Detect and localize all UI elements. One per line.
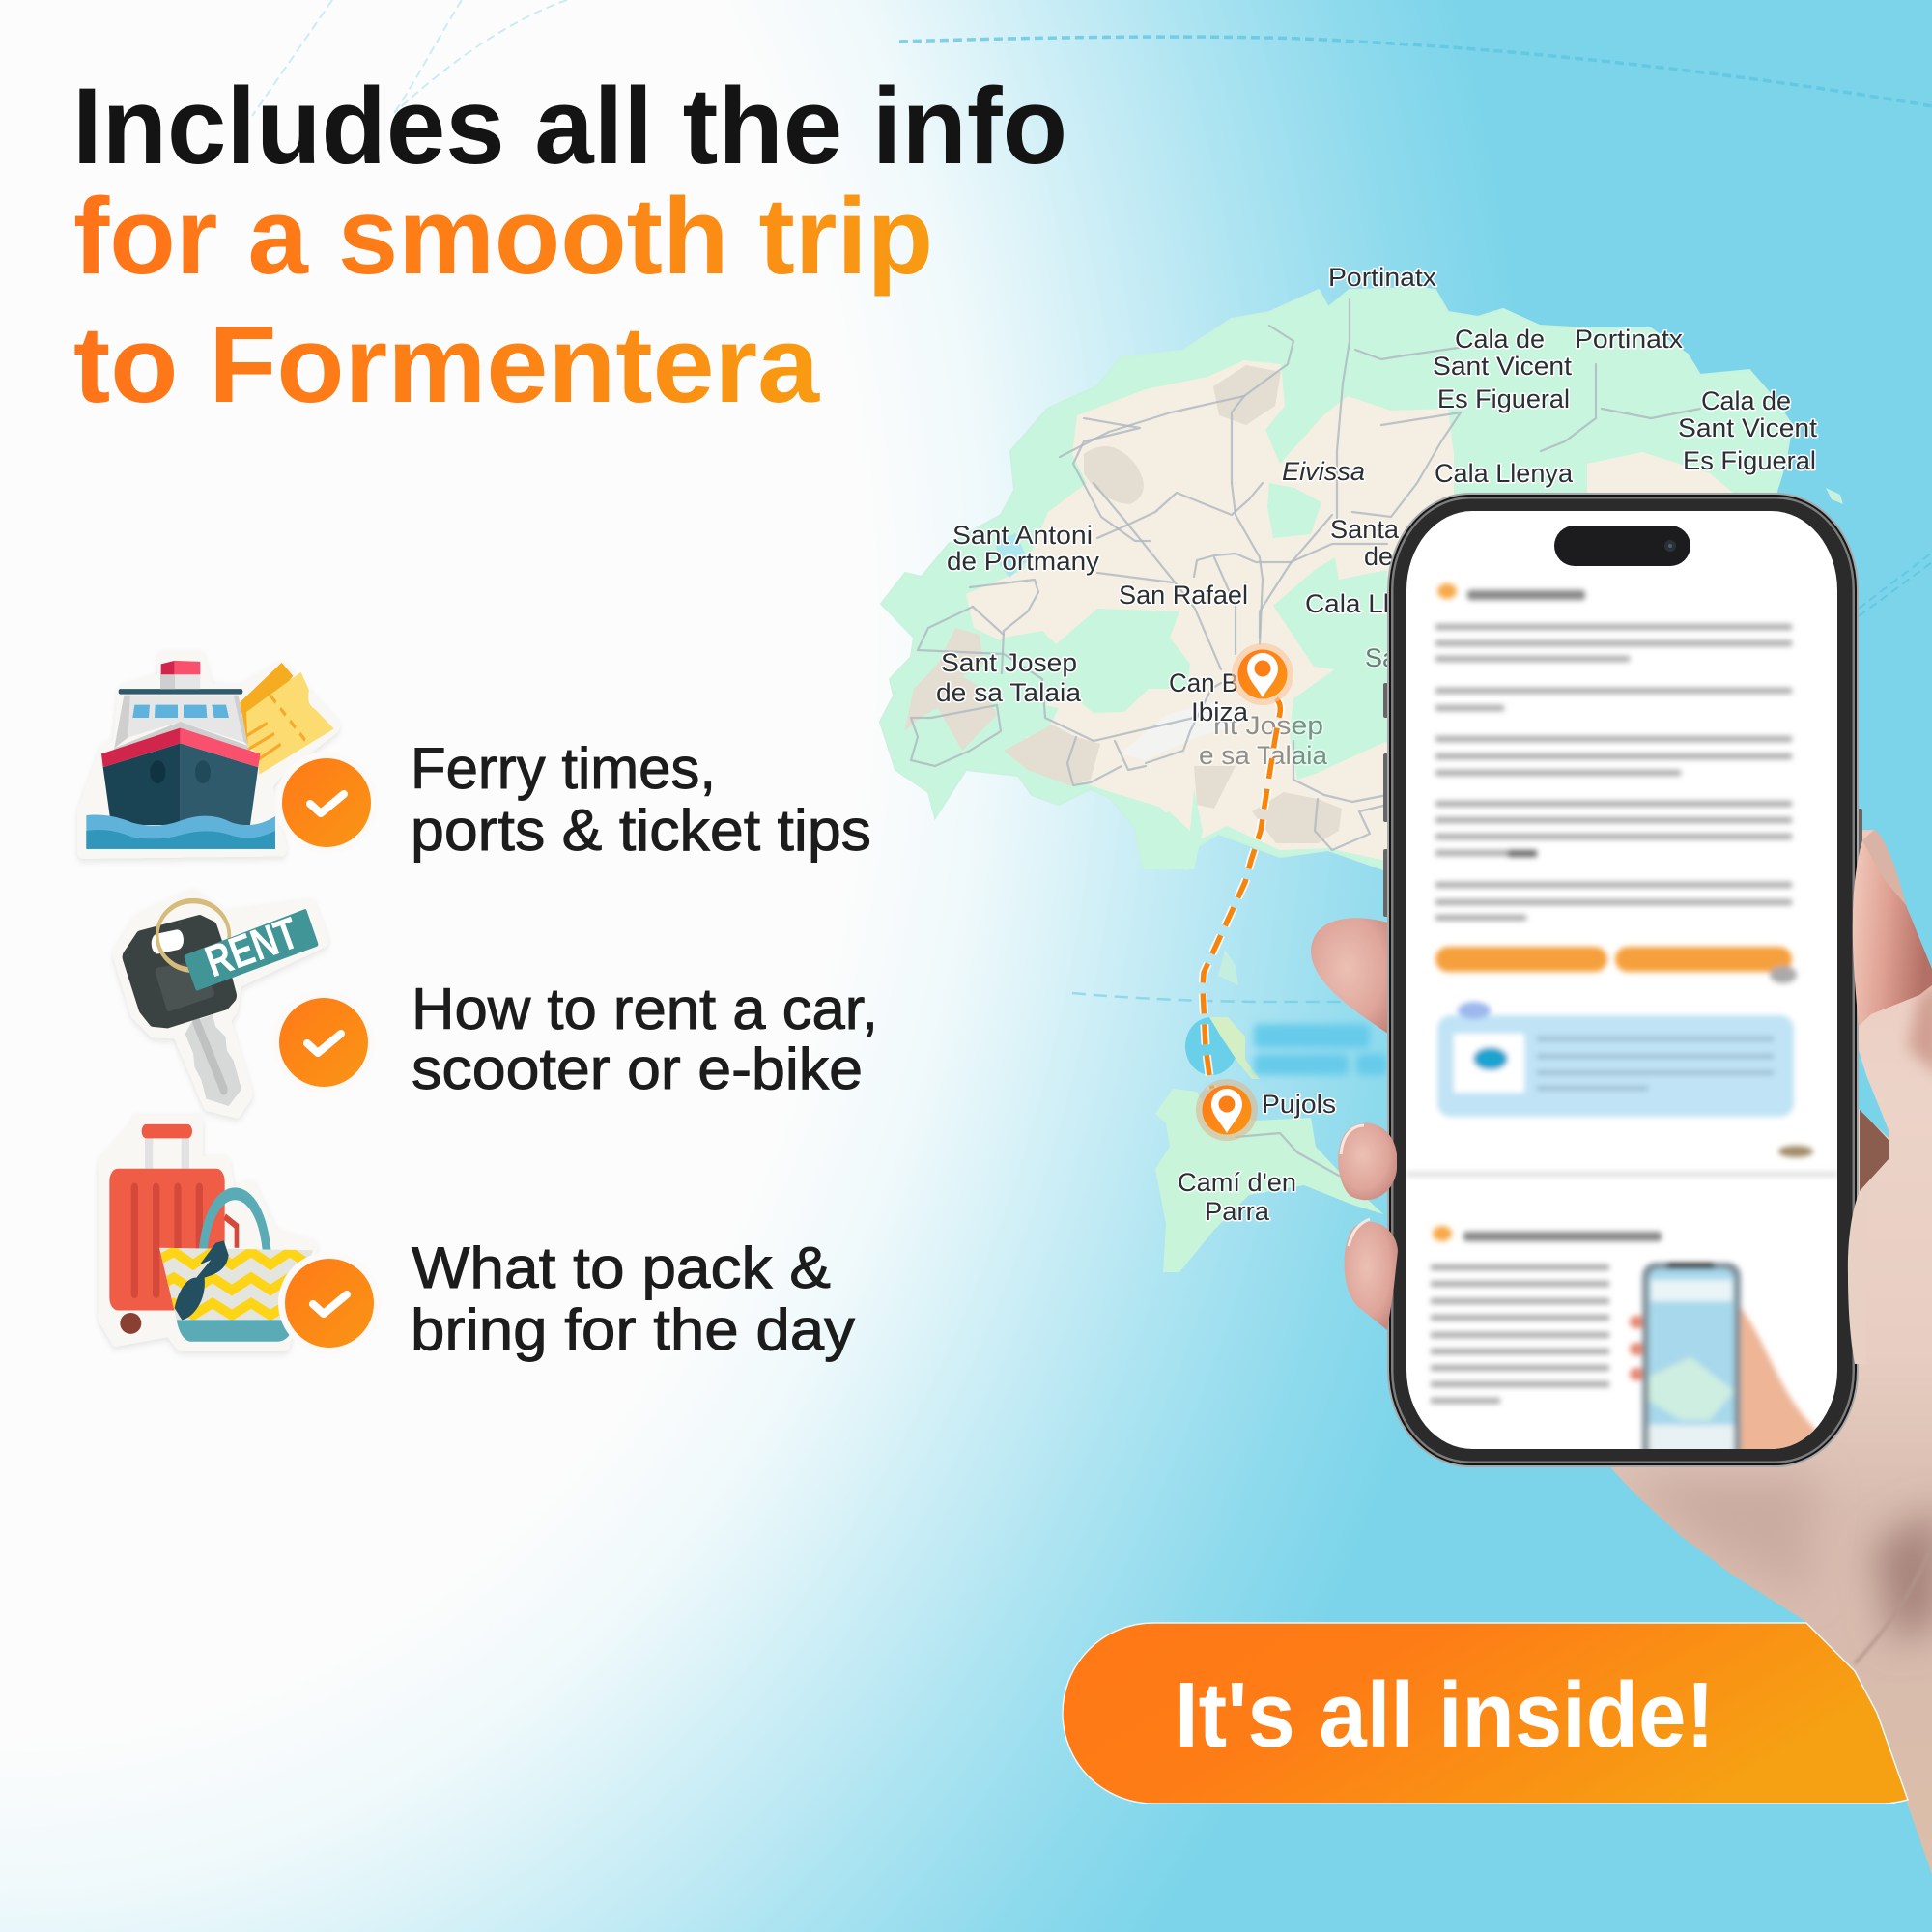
blurred webpage content [1406,583,1837,1465]
road network [911,299,1700,850]
grey hills [904,365,1342,843]
lower finger [1345,1222,1398,1330]
phone side buttons [1383,683,1862,917]
blurred marine label [1254,1024,1387,1075]
check badge [275,752,378,854]
screen [1406,511,1837,1449]
map place labels: nt Josep [1213,711,1323,740]
map place labels: Sant Vicent [1433,352,1573,381]
gap between finger and palm [1859,1050,1889,1138]
palm [1611,830,1932,1874]
top finger [1311,918,1397,1039]
map place labels: Sant Vicent [1678,413,1818,442]
map place labels: Santa [1330,515,1400,544]
icon: ferry and ticket [82,659,335,851]
mini phone photo [1630,1263,1816,1465]
text: rentals: scooter or e-bike [412,1037,863,1101]
icon: rental key [118,897,324,1111]
text: ferry times: Ferry times, [411,736,716,801]
body copy lines [1435,624,1792,921]
phone body [1387,493,1859,1467]
Ibiza farmland [966,360,1642,860]
green forest patches [966,415,1594,869]
map place labels: de sa Talaia [936,678,1082,707]
dashed ferry routes in the sea [252,0,1932,1002]
feature 3: packing [103,1122,855,1362]
map place labels: de Portmany [947,547,1100,576]
body copy lines 2 [1431,1264,1609,1404]
Ibiza island landmass [880,288,1792,869]
lower finger nail [1349,1219,1370,1246]
cursor smudge [1770,966,1797,983]
feature 2: rental [118,897,878,1111]
check badge [272,991,375,1094]
map place labels: Sant Antoni [952,521,1093,550]
title [72,66,1067,425]
divider [1406,1172,1837,1177]
download callout [1437,1002,1794,1117]
fingernail [1862,830,1906,905]
map place labels: Eivissa [1282,457,1365,486]
text: ferry times: ports & ticket tips [411,798,871,863]
map place labels: Pujols [1262,1090,1336,1119]
icon: suitcase and beach bag [103,1122,313,1344]
Sant Antoni bay [995,533,1028,578]
title: Includes all the info [72,66,1067,186]
phone mockup [1383,493,1862,1467]
map place labels: Cala Ll [1305,589,1389,618]
call to action button [1063,1623,1908,1804]
skin shading [1633,980,1932,1663]
map place labels: Portinatx [1328,263,1437,292]
map place labels: Camí d'en [1178,1168,1296,1197]
map place labels: Cala de [1455,325,1545,354]
map place labels: de [1364,542,1393,571]
middle finger [1338,1122,1397,1200]
map place labels: San Rafael [1119,581,1248,610]
eastern farmland [1587,452,1739,497]
right index finger [1853,830,1932,1026]
feature 1: ferry [82,659,871,863]
dynamic island [1554,526,1690,566]
map place labels: Sa [1365,643,1398,672]
map pin: Formentera [1196,1079,1258,1141]
map: Ibiza and Formentera [880,263,1843,1272]
map pin: Ibiza [1232,643,1293,705]
map place labels: Sant Josep [941,648,1077,677]
eastern islet [1826,488,1843,504]
shadowed finger behind [1860,1109,1889,1191]
text: ferry times [411,736,871,863]
lagoon [1185,1017,1237,1075]
map place labels: Can B [1169,668,1238,697]
text: packing: bring for the day [411,1297,855,1362]
hand behind phone [1311,830,1932,1874]
fingers over phone edge [1338,830,1932,1364]
map place labels [936,263,1818,1226]
Espalmador islet [1209,1017,1260,1079]
icon: rental key: RENT [199,907,305,986]
orange buttons [1435,947,1792,972]
text: rentals [412,977,878,1101]
section heading: check updates [1437,583,1585,600]
map place labels: Ibiza [1191,697,1249,726]
built-up area [1121,702,1249,760]
map place labels: Parra [1205,1197,1270,1226]
text: rentals: How to rent a car, [412,977,878,1041]
text: packing: What to pack & [412,1236,831,1300]
palm edge over rim [1848,1191,1866,1364]
section heading: choose the route [1433,1226,1662,1241]
map place labels: Es Figueral [1683,446,1816,475]
map place labels: e sa Talaia [1199,741,1328,770]
map place labels: Cala Llenya [1435,459,1574,488]
middle finger nail [1341,1125,1364,1154]
call to action button: It's all inside! [1175,1663,1715,1767]
check badge [278,1252,381,1354]
small islet [1218,950,1238,985]
map place labels: Cala de [1701,386,1791,415]
ferry route dashed line [1203,698,1280,1089]
title: to Formentera [73,304,820,425]
map place labels: Portinatx [1575,325,1684,354]
Formentera road [1236,1133,1339,1176]
text: packing [411,1236,855,1362]
title: for a smooth trip [73,176,933,297]
Formentera island [1155,1089,1383,1272]
map place labels: Es Figueral [1437,384,1570,413]
